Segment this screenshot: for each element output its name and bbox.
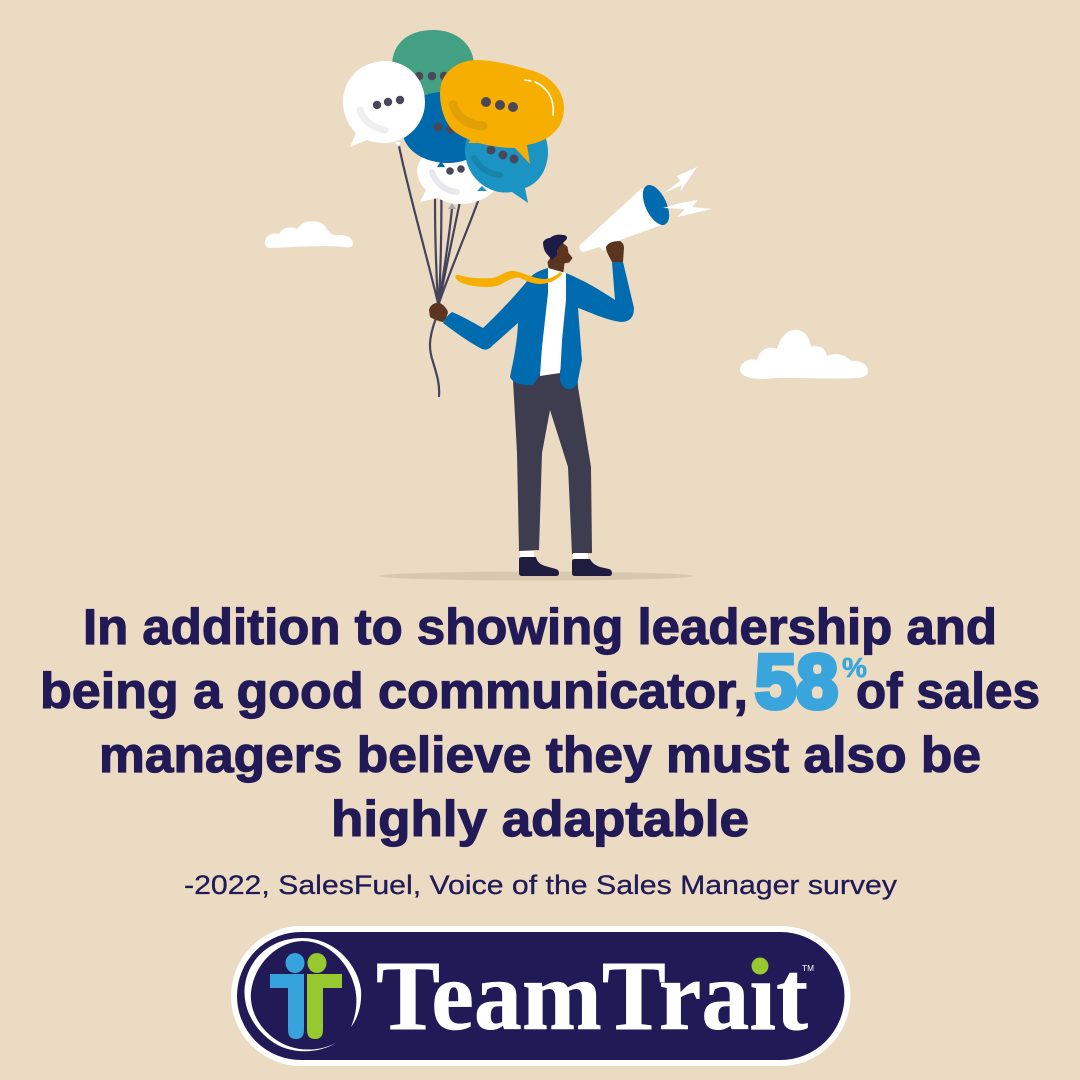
logo figure: green <box>307 953 342 1039</box>
balloon: green speech bubble <box>392 30 474 98</box>
headline: managers believe they must also be <box>99 727 981 783</box>
knot: grey balloon <box>448 203 456 209</box>
logo figure: blue <box>270 953 304 1039</box>
headline <box>40 599 1040 847</box>
shoes <box>519 557 612 576</box>
trademark: TM <box>802 964 814 973</box>
balloon: back white speech bubble <box>417 140 500 209</box>
left hand holding strings <box>429 303 448 322</box>
headline: In addition to showing leadership and <box>83 599 997 655</box>
headline: highly adaptable <box>331 791 749 847</box>
megaphone mouth <box>637 181 675 229</box>
logo ring <box>244 938 361 1051</box>
balloon: light blue speech bubble <box>465 112 548 203</box>
balloon: white speech bubble <box>343 61 425 147</box>
shout bolt top <box>664 167 697 193</box>
right fist <box>606 241 624 262</box>
jacket <box>443 262 634 389</box>
businessman with megaphone <box>429 167 712 576</box>
logo i dot <box>749 955 773 977</box>
balloon: yellow speech bubble <box>440 60 564 164</box>
cloud: right <box>740 330 868 379</box>
headline: of sales <box>856 663 1040 719</box>
ground shadow <box>379 572 693 580</box>
megaphone cone <box>579 188 667 252</box>
socks <box>520 551 588 561</box>
logo wordmark: TeamTrait <box>376 940 808 1051</box>
TeamTrait logo <box>234 929 848 1063</box>
source line: -2022, SalesFuel, Voice of the Sales Manager survey <box>184 870 898 900</box>
58 percent highlight: % <box>842 652 867 683</box>
white shirt <box>540 268 566 376</box>
balloon: dark blue speech bubble <box>402 92 490 167</box>
trousers <box>513 370 592 554</box>
cloud: left <box>265 221 353 248</box>
logo badge <box>234 929 848 1063</box>
shout bolt bottom <box>663 200 712 217</box>
yellow tie <box>455 271 562 287</box>
headline: being a good communicator, <box>40 663 748 719</box>
58 percent highlight: 58 <box>755 640 838 725</box>
neck and face <box>548 243 572 277</box>
balloon bunch <box>343 30 564 396</box>
hair <box>543 235 567 260</box>
balloon strings <box>399 141 482 396</box>
